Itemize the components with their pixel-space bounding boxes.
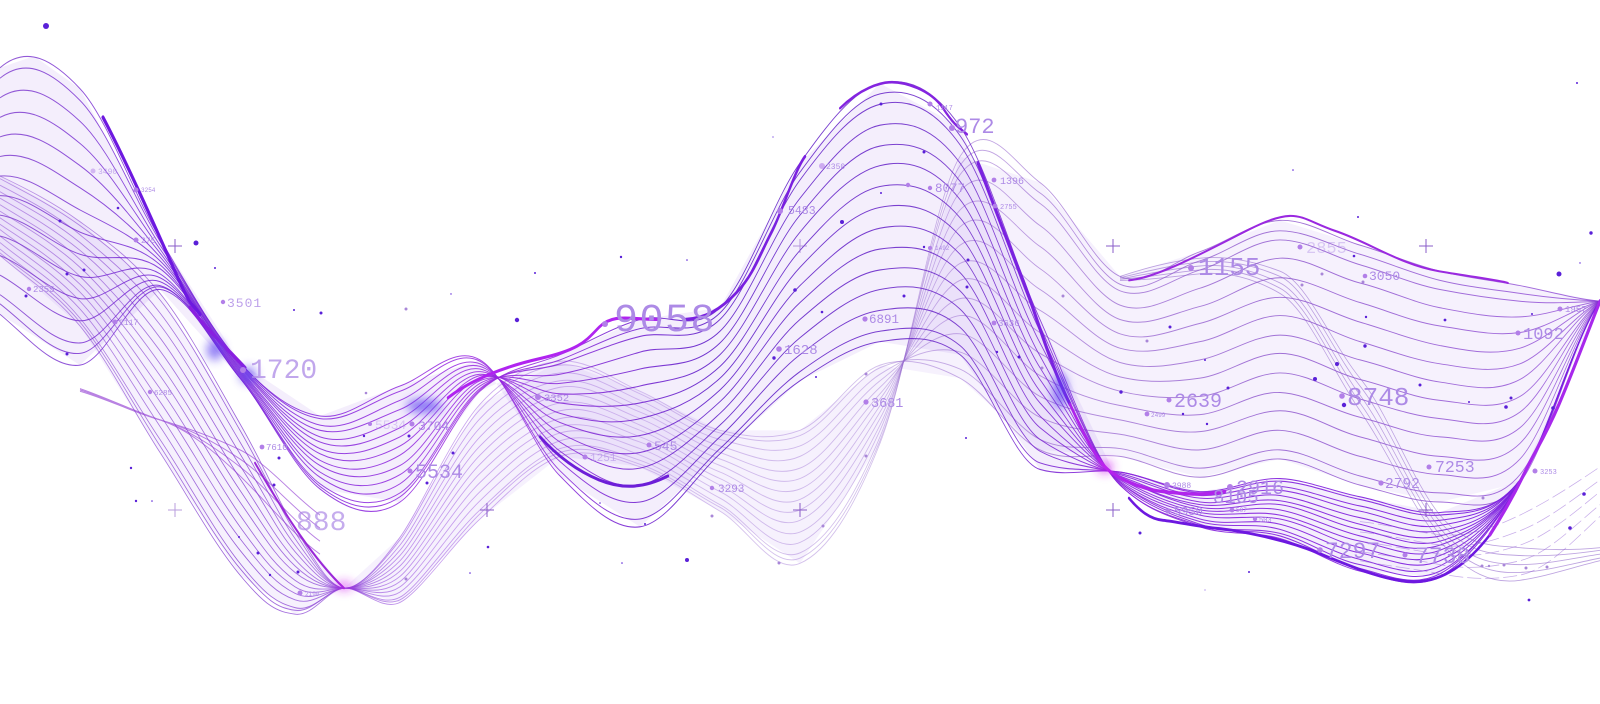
label 9058: 9058 (614, 299, 716, 344)
ribbon tint: lower band (0, 156, 1600, 614)
label 1092: 1092 (1523, 326, 1564, 345)
label 1492: 1492 (935, 245, 950, 252)
label anchor dots (27, 102, 1562, 596)
label 3352: 3352 (544, 393, 569, 405)
label 1155: 1155 (1198, 253, 1260, 283)
label 3636: 3636 (998, 319, 1020, 329)
label 2792: 2792 (1385, 477, 1420, 493)
label 2755: 2755 (1000, 204, 1017, 212)
label 2639: 2639 (1174, 391, 1222, 414)
ribbon family: left smear (80, 389, 320, 554)
label 3704: 3704 (418, 419, 449, 434)
label 2916: 2916 (1236, 478, 1284, 501)
label 5950: 5950 (1174, 505, 1203, 519)
plus markers (168, 239, 1433, 517)
label 8105: 8105 (1213, 487, 1259, 509)
label 545: 545 (654, 439, 677, 454)
label 275: 275 (141, 237, 156, 246)
label 5483: 5483 (788, 205, 816, 218)
label 2350: 2350 (826, 163, 845, 172)
label 888: 888 (296, 508, 346, 539)
label 2499: 2499 (1151, 412, 1166, 419)
label 1720: 1720 (250, 356, 317, 387)
label 6891: 6891 (869, 313, 899, 327)
label 2355: 2355 (33, 285, 55, 295)
label 3501: 3501 (227, 296, 262, 311)
ribbon tint: main band (0, 56, 1600, 576)
label 1628: 1628 (784, 343, 818, 359)
ribbon family: lower band (0, 139, 1600, 614)
label 3490: 3490 (98, 168, 117, 177)
number labels (33, 105, 1587, 598)
label 2855: 2855 (1306, 240, 1347, 259)
label 3293: 3293 (718, 484, 744, 496)
label 6285: 6285 (154, 390, 173, 398)
label 507: 507 (1236, 507, 1247, 514)
label 3988: 3988 (1172, 482, 1191, 491)
label 7253: 7253 (1435, 458, 1475, 477)
label 8748: 8748 (1347, 383, 1409, 413)
label 7738: 7738 (1415, 544, 1470, 570)
label 1117: 1117 (936, 105, 953, 113)
label 1396: 1396 (1000, 177, 1024, 188)
label 3253: 3253 (1540, 469, 1557, 477)
wave ribbons (0, 56, 1600, 614)
ribbon family: diagonal light band (1120, 258, 1600, 581)
label 1251: 1251 (590, 453, 617, 465)
label 3681: 3681 (871, 397, 903, 412)
blue glow nodes (207, 340, 1113, 590)
label 2190: 2190 (305, 591, 320, 598)
label 7610: 7610 (266, 443, 288, 453)
label 7297: 7297 (1325, 539, 1380, 565)
label 503: 503 (1259, 517, 1272, 525)
label 8077: 8077 (935, 182, 965, 196)
label 3050: 3050 (1369, 269, 1400, 284)
scattered light dots (365, 272, 1549, 580)
label 1957: 1957 (1565, 305, 1587, 315)
label 972: 972 (955, 115, 995, 140)
label 2117: 2117 (119, 319, 138, 328)
highlighted ribbon edges (103, 82, 1600, 588)
label 3254: 3254 (141, 187, 156, 194)
label 5534: 5534 (415, 462, 463, 485)
ribbon family: main band (0, 56, 1600, 583)
label 5534 faint: 5534 (375, 418, 406, 433)
ribbon family: faint lower right arcs (1360, 467, 1600, 578)
